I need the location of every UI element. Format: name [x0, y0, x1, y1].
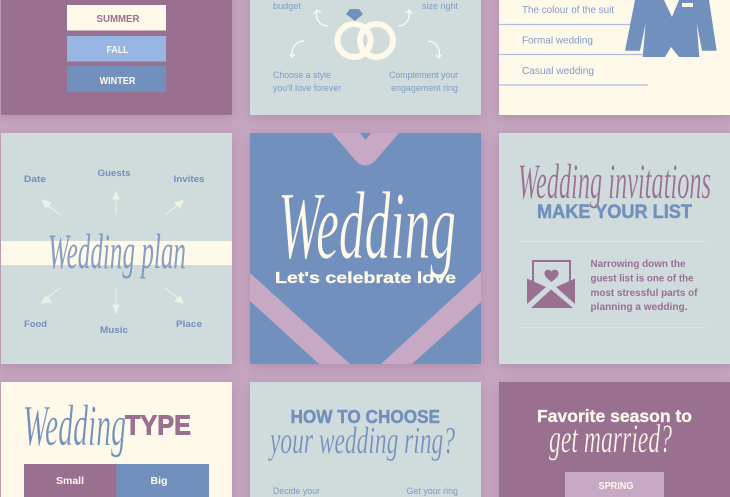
heart outline top notch	[332, 133, 399, 166]
band	[1, 241, 232, 265]
arrow: top left curve	[314, 10, 328, 26]
panel: choosing a ring top	[250, 0, 481, 115]
icon: wedding rings	[338, 9, 393, 57]
heading: make your list: MAKE YOUR LIST	[537, 202, 692, 223]
button: winter	[67, 66, 166, 92]
button: spring	[565, 472, 664, 497]
heart outline left band	[250, 273, 350, 364]
heading: favorite season: Favorite season to	[537, 406, 692, 426]
button: fall	[67, 36, 166, 62]
text: guest list note: most stressful parts of	[590, 288, 698, 299]
icon: envelope with heart	[527, 260, 575, 308]
script title: your wedding ring: your wedding ring?	[268, 420, 455, 462]
script title: wedding: Wedding	[278, 172, 456, 279]
button: fall: FALL	[106, 45, 128, 56]
text: choose a style: you'll love forever	[273, 83, 341, 94]
text: colour of the suit: The colour of the suit	[522, 5, 614, 16]
panel: seasons top	[1, 0, 232, 115]
panel: wedding type	[1, 382, 232, 497]
panel: how to choose	[250, 382, 481, 497]
button: summer: SUMMER	[96, 14, 140, 25]
script title: wedding plan: Wedding plan	[48, 223, 186, 279]
panel: favorite season	[499, 382, 730, 497]
text: guest list note: planning a wedding.	[590, 302, 688, 313]
button: winter: WINTER	[100, 76, 136, 87]
arrow: bottom left curve	[290, 41, 304, 57]
text: decide your: Decide your	[273, 486, 320, 497]
label: music: Music	[100, 325, 128, 336]
text: guest list note: guest list is one of the	[590, 274, 694, 284]
label: food: Food	[24, 319, 47, 330]
button: summer	[67, 5, 166, 30]
arrows: radial	[42, 192, 183, 313]
table header: small	[24, 464, 116, 497]
button: spring: SPRING	[598, 481, 634, 492]
table header: big	[116, 464, 209, 497]
script title: wedding: Wedding	[23, 393, 126, 458]
text: formal wedding: Formal wedding	[522, 36, 593, 46]
text: casual wedding: Casual wedding	[522, 66, 594, 77]
table header: small: Small	[56, 475, 84, 487]
subtitle: Let's celebrate love	[275, 270, 456, 287]
heart outline right band	[381, 272, 481, 364]
table header: big: Big	[151, 475, 167, 487]
panel: invitations	[499, 133, 730, 364]
label: place: Place	[176, 319, 202, 330]
panel: centre heart	[250, 133, 481, 364]
icon: suit jacket	[625, 0, 717, 57]
arrow: top right curve	[398, 10, 412, 26]
text: complement your ring: Complement your	[389, 70, 458, 81]
arrow: bottom right curve	[428, 41, 441, 58]
text: budget: budget	[273, 1, 301, 12]
text: complement your ring: engagement ring	[391, 83, 458, 94]
label: guests: Guests	[98, 168, 130, 179]
text: choose a style: Choose a style	[273, 70, 331, 81]
label: invites: Invites	[174, 174, 204, 185]
heading: type: TYPE	[125, 410, 191, 440]
text: guest list note: Narrowing down the	[590, 259, 686, 270]
heading: how to choose: HOW TO CHOOSE	[290, 406, 440, 427]
panel: wedding plan	[1, 133, 232, 364]
notch triangle	[360, 133, 371, 140]
panel: suit	[499, 0, 730, 115]
label: date: Date	[24, 174, 46, 185]
text: get your ring: Get your ring	[406, 486, 458, 497]
text: size right: size right	[422, 1, 458, 12]
